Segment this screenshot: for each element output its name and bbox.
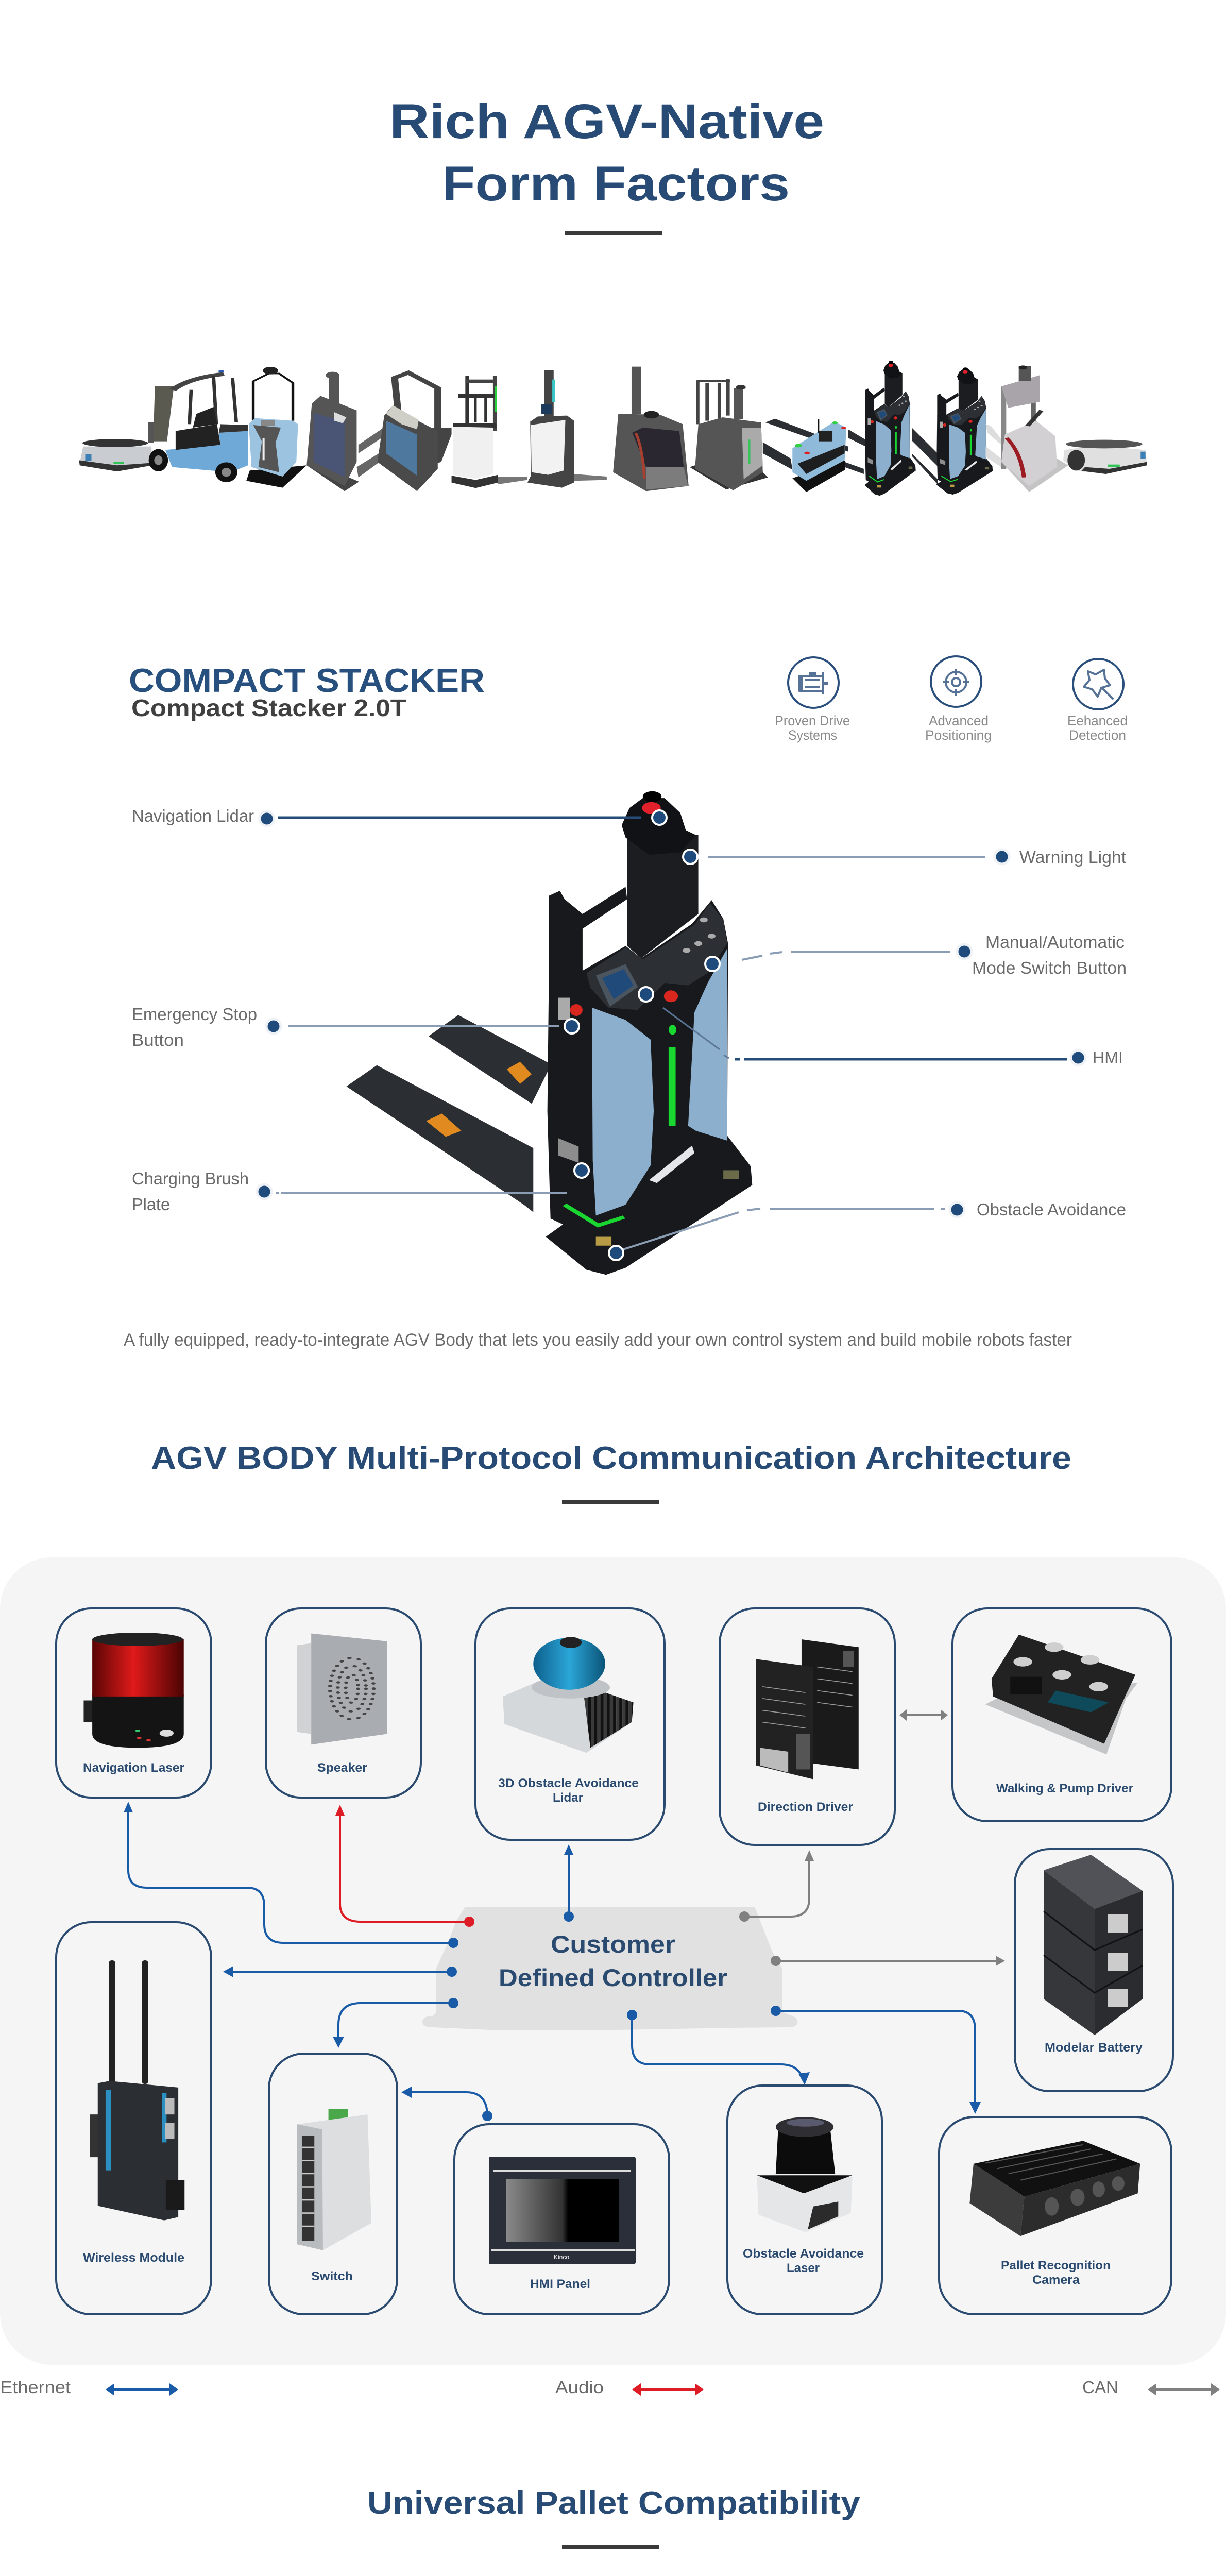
callout: Obstacle Avoidance: Obstacle Avoidance: [977, 1200, 1126, 1219]
robots: left half: [79, 367, 607, 491]
card: HMI Panel: Kinco: [554, 2253, 569, 2261]
card: 3D Obstacle Avoidance Lidar: [475, 1608, 665, 1840]
callout: Navigation Lidar: [132, 806, 667, 826]
callout: Emergency Stop Button: Emergency Stop: [132, 1005, 257, 1024]
connectors: CAN: [739, 1709, 1005, 1966]
feature: Advanced Positioning: Positioning: [925, 727, 992, 743]
card: Navigation Laser: Navigation Laser: [83, 1761, 184, 1775]
legend: CAN: CAN: [1082, 2378, 1118, 2397]
callout: Manual/Automatic Mode Switch Button: Mode Switch Button: [972, 958, 1127, 977]
robot: forklift: [148, 370, 248, 482]
controller block: [422, 1907, 797, 2030]
callout: Emergency Stop Button: Button: [132, 1030, 184, 1049]
callout: HMI: HMI: [1093, 1048, 1123, 1067]
icon: motor: [798, 672, 828, 694]
title: Rich AGV-Native Form Factors: [389, 94, 824, 211]
robot: white mast stacker: [452, 376, 527, 488]
heading: Compact Stacker: COMPACT STACKER: [129, 662, 485, 699]
heading: Compact Stacker: [129, 662, 485, 721]
callout: Charging Brush Plate: Charging Brush: [132, 1169, 249, 1188]
callout: Emergency Stop Button: [132, 1005, 579, 1049]
card: Walking &amp; Pump Driver: [952, 1608, 1171, 1821]
robot: round AMR left: [79, 439, 152, 471]
icon: target: [943, 669, 969, 696]
robot: dark shell stacker: [613, 367, 689, 491]
feature: Enhanced Detection: [1067, 659, 1128, 743]
robots: right half: [613, 367, 865, 492]
callout: Charging Brush Plate: Plate: [132, 1195, 170, 1214]
card: Wireless Module: [56, 1922, 211, 2314]
heading: Compact Stacker: Compact Stacker 2.0T: [131, 694, 406, 721]
feature: Enhanced Detection: Detection: [1069, 727, 1126, 743]
legend: Audio: Audio: [555, 2378, 604, 2397]
card: Obstacle Avoidance Laser: Laser: [787, 2261, 820, 2275]
callout: HMI: [639, 987, 1123, 1067]
feature: Advanced Positioning: [925, 656, 992, 743]
panel: communication architecture: [0, 1557, 1226, 2365]
robot: grey mast stacker: [690, 379, 768, 490]
feature: Proven Drive Systems: [775, 657, 850, 743]
description text: A fully equipped, ready-to-integrate AGV Body that lets you easily add your own control system and build mobile robots faster: [124, 1330, 1072, 1350]
robot: white slim stacker: [527, 370, 607, 488]
heading: Universal Pallet Compatibility: Universal Pallet Compatibility: [367, 2485, 861, 2521]
legend: Ethernet: Ethernet: [0, 2378, 71, 2397]
robot: white and red stacker: [985, 365, 1068, 492]
callout: Warning Light: Warning Light: [1019, 848, 1126, 867]
card: HMI Panel: HMI Panel: [530, 2277, 590, 2291]
card: Speaker: Speaker: [317, 1761, 367, 1775]
card: Walking &amp; Pump Driver: Walking & Pump Driver: [996, 1782, 1133, 1795]
large compact stacker robot: [346, 791, 752, 1275]
card: Pallet Recognition Camera: Pallet Recognition: [1001, 2259, 1111, 2273]
callout: Warning Light: [683, 848, 1126, 867]
legend: Audio: [555, 2378, 704, 2397]
callout: Obstacle Avoidance: [609, 1200, 1126, 1260]
feature: Proven Drive Systems: Systems: [788, 727, 837, 743]
card: Pallet Recognition Camera: Camera: [1032, 2273, 1080, 2287]
card: Speaker: [266, 1608, 421, 1798]
card: Switch: [269, 2054, 397, 2314]
heading: Communication Architecture: AGV BODY Multi-Protocol Communication Architecture: [151, 1440, 1071, 1476]
callout: Manual/Automatic Mode Switch Button: [705, 933, 1127, 977]
robot: dark blue mast stacker: [378, 372, 452, 491]
robot: black-blue stacker 1: [864, 361, 916, 496]
robot: black-blue stacker 2: [912, 367, 993, 495]
card: Obstacle Avoidance Laser: [727, 2086, 882, 2314]
card: 3D Obstacle Avoidance Lidar: Lidar: [553, 1791, 583, 1805]
icon: star wand: [1084, 670, 1113, 699]
card: Navigation Laser: [56, 1608, 211, 1798]
robot: blue low pallet truck: [763, 419, 865, 492]
robot line-up illustration: [79, 361, 1147, 496]
connector: audio: [335, 1805, 474, 1927]
legend: CAN: [1082, 2378, 1220, 2397]
card: Modelar Battery: Modelar Battery: [1045, 2041, 1143, 2055]
card: Direction Driver: Direction Driver: [758, 1800, 853, 1814]
card: Switch: Switch: [311, 2269, 353, 2283]
card: Modelar Battery: [1015, 1849, 1173, 2091]
legend: Ethernet: [0, 2378, 178, 2397]
title: Rich AGV-Native Form Factors: Form Factors: [442, 157, 790, 211]
card: Pallet Recognition Camera: [939, 2117, 1171, 2314]
controller block: Defined Controller: [499, 1964, 727, 1991]
controller block: Customer: [551, 1930, 675, 1958]
card: 3D Obstacle Avoidance Lidar: 3D Obstacle Avoidance: [498, 1776, 639, 1790]
card: Obstacle Avoidance Laser: Obstacle Avoidance: [743, 2247, 864, 2261]
robot: light blue stacker with arch: [246, 367, 306, 488]
robot: dark purple pallet stacker: [306, 372, 384, 491]
card: Direction Driver: [720, 1608, 895, 1845]
feature: Proven Drive Systems: Proven Drive: [775, 713, 850, 728]
callout: Navigation Lidar: Navigation Lidar: [132, 806, 254, 825]
callout: Manual/Automatic Mode Switch Button: Manual/Automatic: [985, 933, 1125, 952]
card: Wireless Module: Wireless Module: [83, 2251, 184, 2265]
callout: Charging Brush Plate: [132, 1163, 589, 1214]
feature: Enhanced Detection: Eehanced: [1067, 713, 1128, 728]
connectors: ethernet: [124, 1802, 981, 2121]
card: HMI Panel: [454, 2124, 669, 2314]
robot: round AMR right: [1063, 440, 1147, 474]
feature: Advanced Positioning: Advanced: [929, 713, 989, 728]
title: Rich AGV-Native Form Factors: Rich AGV-Native: [389, 94, 824, 149]
legend: [0, 2378, 1220, 2397]
